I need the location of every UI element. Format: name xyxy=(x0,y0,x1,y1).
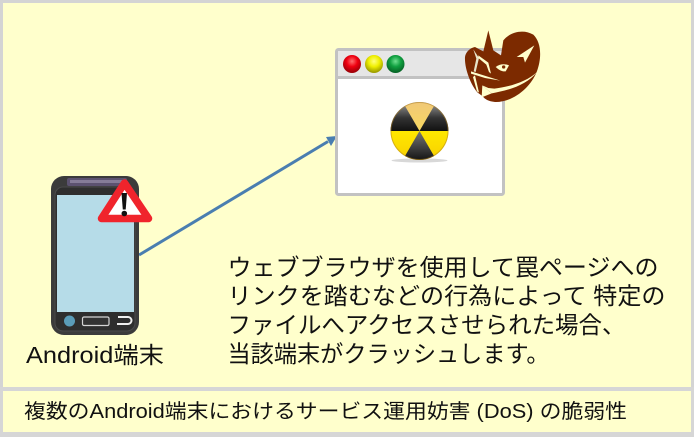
phone screen xyxy=(57,195,134,312)
icon: devil face xyxy=(465,30,540,102)
icon: smartphone xyxy=(51,176,139,335)
window buttons xyxy=(343,55,404,73)
caption band xyxy=(0,387,694,437)
phone buttons xyxy=(64,316,132,326)
description text: ウェブブラウザを使用して罠ページへの xyxy=(228,254,658,280)
icon: radiation hazard sphere xyxy=(390,102,448,162)
label: Android device: Android端末 xyxy=(26,342,164,368)
description text: リンクを踏むなどの行為によって 特定の xyxy=(228,283,666,309)
arrow: phone to browser xyxy=(139,136,337,255)
description text: 当該端末がクラッシュします。 xyxy=(228,341,550,367)
description text xyxy=(228,254,666,367)
icon: warning triangle xyxy=(102,183,148,218)
icon: browser window xyxy=(336,50,504,194)
description text: ファイルへアクセスさせられた場合、 xyxy=(228,312,626,338)
caption text: 複数のAndroid端末におけるサービス運用妨害 (DoS) の脆弱性 xyxy=(24,400,627,423)
